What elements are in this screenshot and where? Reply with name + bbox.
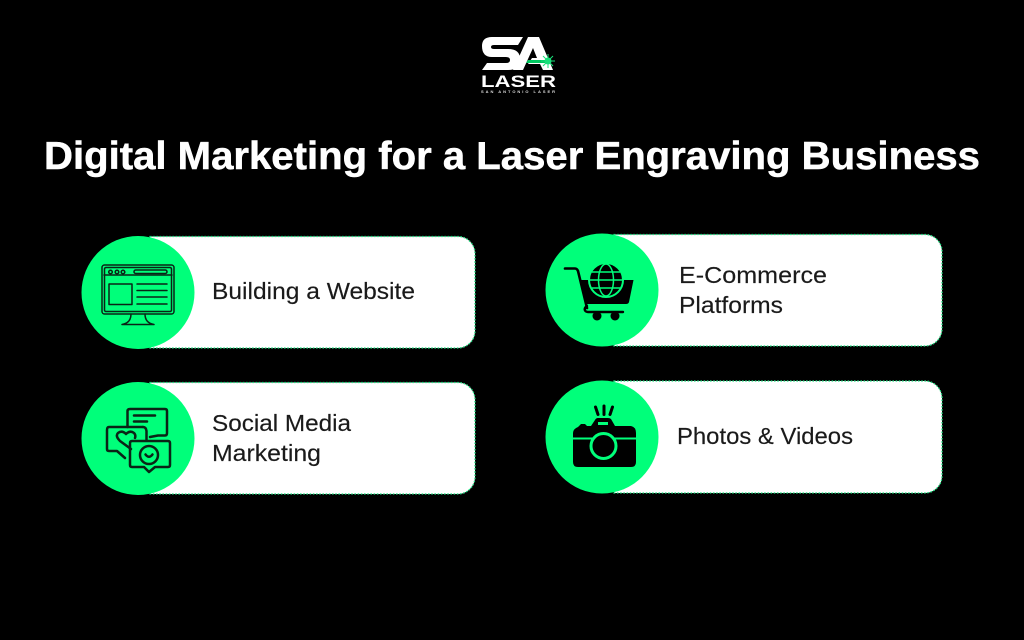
panel: Photos & Videos [546,380,942,494]
label: Building a Website [212,278,415,304]
logo: SA Laser [481,37,556,94]
icon circle [82,382,194,495]
icon: shopping cart with globe [565,263,634,320]
icon circle [546,380,658,494]
panel: E-Commerce Platforms: Platforms [679,292,783,318]
icon: camera [573,406,636,467]
panel: Social Media Marketing [82,382,475,495]
logo letter S [482,37,523,70]
panel: Social Media Marketing: Marketing [212,440,321,466]
logo tagline: SAN ANTONIO LASER [481,89,555,94]
card background [614,234,942,346]
icon: chat bubbles [107,409,170,472]
panel: E-Commerce Platforms [546,234,942,346]
label: E-Commerce [679,262,827,288]
label: Photos & Videos [677,423,853,449]
icon circle [82,236,194,349]
card background [150,236,475,348]
logo wordmark: LASER [481,72,556,91]
logo laser beam [526,54,555,68]
card background [614,381,942,493]
icon circle [546,234,658,346]
logo letter A [513,37,553,70]
label: Social Media [212,410,352,436]
title: Digital Marketing for a Laser Engraving Business [44,135,980,178]
panel: Building a Website [82,236,475,349]
icon: website monitor [102,265,174,324]
card background [150,382,475,494]
